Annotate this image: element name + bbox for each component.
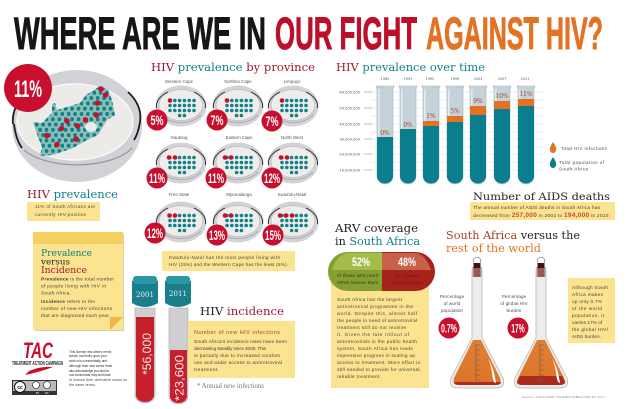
province: Eastern Cape [206, 135, 264, 188]
heading: HIV prevalence by province: HIV prevalence by province [151, 60, 315, 74]
tube chart: prevalence over time: 11% [519, 91, 533, 98]
province: KwaZulu-Natal: 15% [265, 227, 281, 243]
badge: 11% [4, 64, 52, 112]
TAC logo [12, 338, 63, 375]
province: Northen Cape [206, 79, 264, 130]
tube chart: prevalence over time: 1995 [426, 77, 434, 81]
province: Mpumalanga: Mpumalanga [226, 192, 252, 197]
panel: ARV text: antiretrovirals in the public health [337, 339, 417, 344]
pill: ARV coverage: ARVs recieve them [337, 280, 378, 285]
province: Gauteng: 11% [149, 170, 165, 186]
footnote: annual new infections: * Annual new infections [197, 382, 264, 390]
callout: world comparison: up only 0.7% [572, 299, 602, 304]
tube chart: prevalence over time: 1% [426, 113, 436, 120]
badge: 0.7% [438, 318, 460, 338]
callout: world comparison: of the world [572, 306, 602, 311]
tube chart: prevalence over time: 2007 [498, 77, 506, 81]
tube chart: prevalence over time: 40,000,000 [339, 122, 361, 126]
blood tube 2011 [165, 276, 191, 404]
panel: ARV text [331, 270, 429, 388]
heading: Number of AIDS deaths: Number of AIDS deaths [473, 192, 610, 203]
callout: HIV prevalence: 11% of South Africans are [35, 204, 96, 209]
province: Limpopo: Limpopo [284, 79, 301, 84]
panel: ARV text: antiretroviral programme in the [337, 304, 413, 309]
province: Western Cape [146, 79, 206, 130]
callout: AIDS deaths [470, 202, 615, 220]
pill: ARV coverage: of those who need [337, 273, 379, 278]
heading: HIV prevalence over time: HIV prevalence over time [336, 60, 485, 74]
callout: HIV prevalence: currently HIV-positive [35, 212, 87, 217]
TAC logo: TAC [23, 338, 54, 363]
tube chart: prevalence over time: 50,000,000 [339, 106, 361, 110]
source: Source: ASSA 2008, UNAIDS/WHO/UNICEF 2011 [522, 395, 605, 400]
label: world population [440, 294, 465, 314]
province: Free State: 12% [147, 225, 163, 241]
blood tube 2011: 2011 [169, 290, 187, 298]
petri dish with South Africa map [12, 70, 142, 182]
sticky note: prevalence versus incidence [33, 232, 124, 331]
province: Northen Cape: 7% [210, 112, 224, 128]
tube chart: prevalence over time: 1991 [404, 77, 412, 81]
license text: also acknowledge you and be [69, 369, 109, 373]
sticky note: prevalence versus incidence: versus [40, 258, 70, 266]
tube chart: prevalence over time: 10,000,000 [339, 168, 361, 172]
province: Mpumalanga: 13% [209, 227, 225, 243]
callout: world comparison: Although South [572, 285, 608, 290]
license text: This license lets others remix, [69, 350, 112, 354]
label: global HIV burden [500, 294, 529, 314]
legend: Total HIV infections [561, 146, 608, 151]
sticky note: prevalence versus incidence: of people living with HIV in [41, 284, 106, 290]
label: global HIV burden: of global HIV [500, 301, 529, 307]
tube chart: prevalence over time: 1985 [381, 77, 389, 81]
callout: world comparison: population, it [572, 313, 605, 318]
title: WHERE ARE WE IN [14, 8, 266, 59]
heading: HIV incidence: HIV incidence [200, 304, 284, 318]
callout: provinces summary [162, 251, 295, 271]
legend [550, 142, 608, 172]
tube chart: prevalence over time: 60,000,000 [339, 90, 361, 94]
tube chart: prevalence over time: 0% [403, 122, 413, 129]
callout: HIV incidence: decreasing steadily since 2000. This [194, 346, 267, 352]
province: Western Cape: 5% [150, 112, 164, 128]
province: KwaZulu-Natal: KwaZulu-Natal [278, 192, 306, 197]
license text: although their new works must [69, 364, 112, 368]
sticky note: prevalence versus incidence: Prevalence is the total number [41, 276, 114, 282]
blood tube 2001 [132, 276, 158, 403]
license text: the same terms. [69, 383, 96, 387]
legend: South Africa [559, 166, 589, 172]
callout: AIDS deaths: decreased from 257,000 in 2003 to 194,000 in 2010. [473, 212, 610, 219]
province: Mpumalanga [206, 192, 264, 246]
label: world population: population [441, 308, 463, 314]
province: North West [262, 135, 318, 188]
license text: tweak, and build upon your [69, 354, 108, 358]
blood tube 2011: *23,600 [172, 355, 186, 401]
tube chart: prevalence over time: 5% [450, 108, 460, 115]
license text: to license their derivative works on [69, 378, 127, 382]
province: KwaZulu-Natal [262, 192, 318, 246]
callout: world comparison: the global HIV/ [572, 327, 609, 332]
callout: HIV incidence: South Africa's incidence rates have been [194, 339, 287, 345]
heading: ARV coverage [334, 221, 420, 248]
heading: ARV coverage: ARV coverage [334, 221, 418, 235]
tube chart: prevalence over time: 0% [380, 130, 390, 137]
callout: HIV prevalence [27, 202, 100, 221]
callout: HIV incidence: use and wider access to antiretroviral [194, 360, 282, 366]
tube chart: prevalence over time: 9% [473, 98, 483, 105]
tube chart: prevalence over time: 20,000,000 [339, 152, 361, 156]
Creative Commons badge [12, 380, 57, 395]
label: global HIV burden: Percentage [502, 294, 527, 300]
heading: ARV coverage: in South Africa [335, 234, 420, 248]
label: world population: of world [444, 301, 461, 307]
heading: South Africa versus the rest of the world: rest of the world [446, 241, 542, 255]
province: Limpopo: 7% [266, 113, 279, 129]
panel: ARV text: system, South Africa has made [337, 346, 413, 351]
province: Limpopo [262, 79, 318, 132]
tube chart: prevalence over time: 30,000,000 [339, 138, 361, 142]
panel: ARV text: the people in need of antiretroviral [337, 318, 417, 323]
callout: world comparison: carries 17% of [572, 320, 603, 325]
sticky note: prevalence versus incidence: that are diagnosed each year. [41, 313, 110, 319]
badge: 17% [508, 318, 528, 338]
Creative Commons badge: cc [17, 385, 23, 391]
tube chart: prevalence over time: 2003 [474, 77, 482, 81]
TAC logo: TREATMENT ACTION CAMPAIGN [12, 361, 63, 367]
province: North West: North West [281, 135, 304, 140]
province: Free State: Free State [169, 192, 190, 197]
callout: HIV incidence: treatment. [194, 367, 219, 373]
sticky note: prevalence versus incidence: Incidence refers to the [41, 299, 95, 305]
tube chart: prevalence over time [339, 77, 545, 184]
panel: ARV text: impressive progress in scaling up [337, 353, 415, 358]
heading: HIV prevalence: HIV prevalence [27, 187, 118, 201]
tube chart: prevalence over time: 1999 [451, 77, 459, 81]
callout: HIV incidence [188, 321, 295, 378]
badge: 17%: 17% [511, 322, 525, 336]
label: world population: Percentage [440, 294, 465, 300]
callout: HIV incidence: is partially due to increased condom [194, 353, 280, 359]
sticky note: prevalence versus incidence: Prevalence [41, 249, 92, 259]
pill: ARV coverage [328, 252, 435, 291]
panel: ARV text: it. Given the late rollout of [337, 332, 410, 337]
callout: provinces summary: KwaZulu-Natal has the most people living with [169, 255, 280, 260]
Creative Commons badge: BY [36, 392, 40, 395]
flask: global HIV burden [514, 257, 568, 388]
panel: ARV text: world. Despite this, almost half [337, 311, 418, 316]
callout: provinces summary: HIV (15%) and the Western Cape has the least (5%). [169, 262, 288, 267]
legend: Total population of [559, 160, 605, 165]
callout: AIDS deaths: The annual number of AIDS deaths in South Africa has [473, 205, 601, 211]
sticky note: prevalence versus incidence: number of new HIV infections [41, 306, 113, 312]
province: North West: 12% [264, 170, 280, 186]
pill: ARV coverage: access to ARVs [392, 280, 423, 285]
sticky note: prevalence versus incidence: Incidence [41, 266, 87, 276]
panel: ARV text: reliable treatment. [337, 374, 381, 379]
heading: South Africa versus the rest of the world: South Africa versus the [446, 228, 580, 242]
pill: ARV coverage: do not have [395, 273, 420, 278]
title: OUR FIGHT [275, 8, 417, 59]
pill: ARV coverage: 48% [398, 255, 416, 269]
blood tube 2001: 2001 [136, 291, 154, 299]
province: Free State [144, 192, 206, 244]
panel: ARV text: access to treatment. More effort is [337, 360, 421, 365]
callout: world comparison [568, 278, 615, 343]
license text: non-commercial, they don't have [69, 373, 111, 377]
heading: South Africa versus the rest of the world [446, 228, 580, 255]
panel: ARV text: treatment still do not receive [337, 325, 406, 330]
province: Western Cape: Western Cape [165, 79, 194, 84]
license text: work non-commercially, and [69, 359, 107, 363]
province: Eastern Cape: 11% [208, 170, 224, 186]
province: Northen Cape: Northen Cape [224, 79, 252, 84]
province: Gauteng: Gauteng [171, 135, 188, 140]
callout: HIV incidence: Number of new HIV infections [194, 330, 280, 336]
tube chart: prevalence over time: 2011 [521, 77, 529, 81]
label: global HIV burden: burden [507, 308, 522, 314]
sticky note: prevalence versus incidence: South Africa. [41, 290, 71, 296]
Creative Commons badge: NC [45, 392, 49, 395]
province: Gauteng [146, 135, 206, 188]
province: Eastern Cape: Eastern Cape [226, 135, 253, 140]
panel: ARV text: South Africa has the largest [337, 297, 403, 302]
flask: world population [450, 257, 504, 388]
blood tube 2001: *56,000 [140, 333, 154, 375]
tube chart: prevalence over time: 10% [495, 93, 509, 100]
badge: 0.7%: 0.7% [441, 322, 457, 336]
license text [69, 350, 127, 387]
panel: ARV text: still needed to provide for universal, [337, 367, 421, 372]
pill: ARV coverage: 52% [352, 255, 370, 269]
callout: world comparison: AIDS burden. [572, 334, 601, 339]
badge: 11%: 11% [14, 76, 42, 103]
callout: world comparison: Africa makes [572, 292, 604, 297]
